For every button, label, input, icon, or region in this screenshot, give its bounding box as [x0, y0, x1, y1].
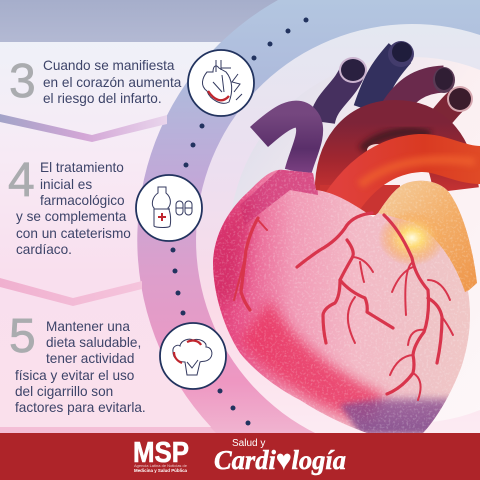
chevron divider 1	[0, 114, 167, 142]
text block 5: dieta saludable,	[46, 335, 141, 350]
gap between great vessels	[367, 144, 387, 156]
coronary veins	[234, 213, 453, 400]
logo: Salud y Cardiología: Salud y	[232, 438, 265, 449]
text block 5: Mantener una	[46, 319, 130, 334]
number 3: 3	[9, 55, 36, 108]
logo: MSP: Agencia Latina de Noticias de	[134, 463, 188, 468]
footer bar	[0, 433, 480, 480]
text block 3: en el corazón aumenta	[43, 75, 182, 90]
text block 4: cardíaco.	[16, 242, 72, 257]
text block 5: factores para evitarla.	[15, 400, 146, 415]
text block 4: con un cateterismo	[16, 226, 131, 241]
text block 5: física y evitar el uso	[15, 368, 134, 383]
chevron divider 2	[0, 278, 142, 306]
text block 4: inicial es	[40, 177, 92, 192]
logo: Salud y Cardiología: Cardi♥logía	[214, 445, 346, 475]
dotted connector	[170, 18, 308, 426]
logo: MSP: Medicina y Salud Pública	[134, 468, 188, 473]
logo: MSP: MSP	[133, 437, 189, 469]
vessel openings	[339, 41, 473, 112]
text block 5: tener actividad	[46, 351, 134, 366]
translucent text panel	[0, 42, 221, 427]
icon: heart with lightning	[188, 50, 254, 116]
heart illustration	[205, 41, 480, 434]
pulmonary artery	[340, 153, 480, 205]
text block 5: del cigarrillo son	[15, 384, 113, 399]
text block 3: el riesgo del infarto.	[43, 91, 162, 106]
heart body	[205, 160, 480, 434]
number 4: 4	[8, 154, 35, 207]
text block 4: y se complementa	[16, 209, 127, 224]
text block 4: El tratamiento	[40, 160, 124, 175]
icon: broccoli	[160, 323, 226, 389]
text block 4: farmacológico	[40, 193, 125, 208]
vessel shading	[362, 132, 430, 150]
number 5: 5	[9, 310, 36, 363]
vessels	[259, 53, 460, 200]
text block 3: Cuando se manifiesta	[43, 58, 175, 73]
icon: medicine bottle and pills	[136, 175, 202, 241]
